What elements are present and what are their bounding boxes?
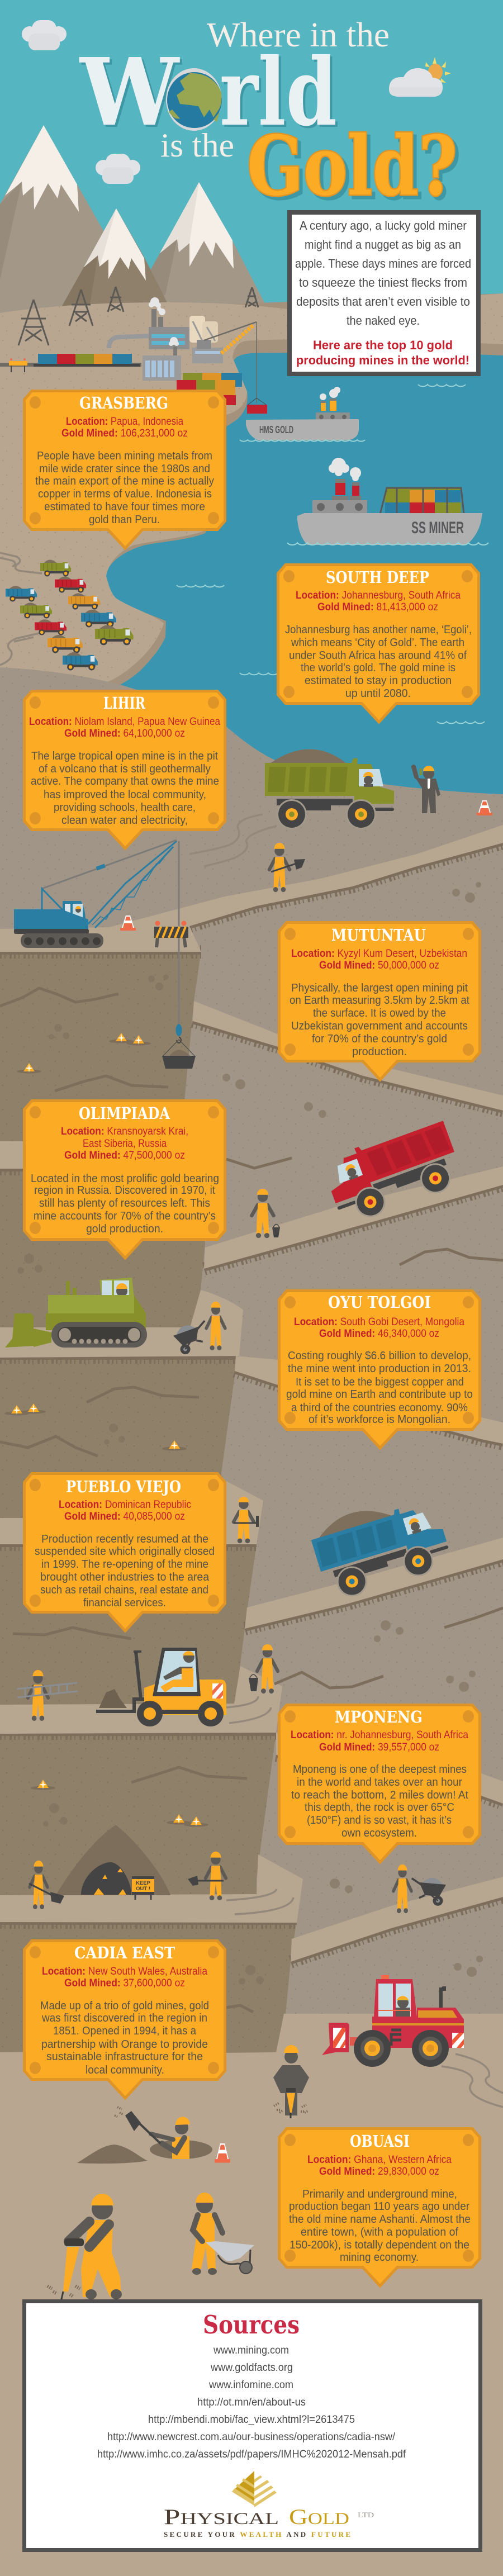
panel: Grasberg: the main export of the mine is actually <box>35 475 214 487</box>
panel: Mponeng: this depth, the rock is over 65°C <box>305 1801 454 1814</box>
panel: Grasberg: mile wide crater since the 1980s and <box>39 463 210 475</box>
panel: Mutuntau: Location: Kyzyl Kum Desert, Uzbekistan <box>291 948 467 960</box>
panel: Obuasi: entire town, (with a population of <box>301 2226 458 2238</box>
factory complex <box>109 297 223 381</box>
panel: Cadia East: Made up of a trio of gold mines, gold <box>40 2000 209 2012</box>
icon: sun behind cloud <box>389 57 451 97</box>
panel: Cadia East <box>25 1941 225 2098</box>
panel: Grasberg: copper in terms of value. Indonesia is <box>38 488 212 500</box>
title <box>79 16 457 214</box>
panel: Mponeng: MPONENG <box>335 1707 423 1726</box>
orange forklift <box>96 1648 226 1726</box>
intro text panel: Here are the top 10 gold <box>313 338 453 352</box>
panel: Obuasi: Gold Mined: 29,830,000 oz <box>319 2166 439 2177</box>
logo: Physical Gold: SECURE YOUR WEALTH AND FUTURE <box>164 2530 350 2539</box>
panel: Obuasi: OBUASI <box>350 2132 410 2151</box>
panel: South Deep: under South Africa has around 41% of <box>289 649 467 662</box>
man in suit on phone <box>414 766 440 813</box>
panel: South Deep: Gold Mined: 81,413,000 oz <box>317 601 438 613</box>
panel: South Deep: SOUTH DEEP <box>326 568 429 587</box>
panel: Obuasi: Primarily and underground mine, <box>302 2188 457 2200</box>
panel: Mutuntau: Physically, the largest open mining pit <box>291 982 468 994</box>
red dump truck tipping <box>320 1117 466 1227</box>
title: W <box>79 38 180 147</box>
panel: Lihir: Location: Niolam Island, Papua New Guinea <box>29 716 220 728</box>
keep out sign <box>132 1876 154 1900</box>
road barrier <box>9 358 27 372</box>
panel: Cadia East: sustainable infrastructure for the <box>46 2051 203 2063</box>
panel: Cadia East: partnership with Orange to provide <box>41 2038 208 2051</box>
panel: Lihir: has improved the local community, <box>44 789 206 801</box>
traffic cone <box>477 800 492 815</box>
ship: SS Miner: SS MINER <box>411 519 464 537</box>
worker with bucket <box>252 1189 280 1238</box>
intro text panel: the naked eye. <box>347 314 420 328</box>
panel: Obuasi <box>279 2128 480 2286</box>
logo: Physical Gold <box>164 2471 374 2539</box>
panel: Mponeng: Gold Mined: 39,557,000 oz <box>319 1742 439 1753</box>
panel: Grasberg: Gold Mined: 106,231,000 oz <box>61 428 188 439</box>
panel: Mutuntau: MUTUNTAU <box>331 926 426 945</box>
source links: www.infomine.com <box>208 2379 293 2391</box>
upper land: dark shoreline <box>0 293 503 727</box>
panel: Mponeng <box>279 1705 480 1862</box>
olive bulldozer <box>5 1278 147 1348</box>
source links: http://mbendi.mobi/fac_view.xhtml?l=2613475 <box>148 2414 355 2426</box>
panel: Pueblo Viejo: financial services. <box>83 1597 166 1609</box>
worker with bucket <box>249 1644 278 1693</box>
source links: www.goldfacts.org <box>210 2362 293 2374</box>
logo: Physical Gold: GOLD <box>289 2505 349 2529</box>
ship: SS Miner <box>287 458 488 545</box>
waves <box>177 385 485 723</box>
sea <box>0 335 503 805</box>
panel: Mutuntau: the surface. It is owed by the <box>313 1007 446 1019</box>
logo: Physical Gold: P HYSICAL <box>164 2505 279 2529</box>
title: Gold? <box>247 118 457 214</box>
panel: Mponeng: Location: nr. Johannesburg, South Africa <box>291 1729 468 1741</box>
mine pits <box>0 950 297 2057</box>
panel: Obuasi: production began 110 years ago under <box>289 2200 469 2213</box>
panel: Pueblo Viejo: brought other industries to the area <box>40 1571 210 1583</box>
large worker with wheelbarrow <box>192 2193 254 2275</box>
worker digging in a hole <box>77 2107 212 2164</box>
panel: Olimpiada: Gold Mined: 47,500,000 oz <box>64 1150 185 1161</box>
panel: Cadia East: Gold Mined: 37,600,000 oz <box>64 1977 185 1989</box>
panel: Mponeng: (150°F) and is so vast, it has it’s <box>307 1814 452 1827</box>
panel: sources <box>25 2302 481 2550</box>
ship: HMS Gold <box>240 387 365 442</box>
panel: Pueblo Viejo: Gold Mined: 40,085,000 oz <box>64 1511 185 1522</box>
panel: Mponeng: own ecosystem. <box>341 1827 417 1839</box>
large worker with jackhammer <box>48 2194 122 2304</box>
panel: Olimpiada: region in Russia. Discovered in 1970, it <box>34 1184 215 1197</box>
worker with hammer <box>234 1497 259 1543</box>
sky background <box>0 0 503 391</box>
panel: Cadia East: was first discovered in the region in <box>41 2012 207 2024</box>
panel: South Deep <box>278 564 478 722</box>
panel: South Deep: Johannesburg has another name, ‘Egoli’, <box>285 624 472 636</box>
panel: Grasberg: GRASBERG <box>79 393 168 412</box>
intro text panel: producing mines in the world! <box>296 353 469 367</box>
worker with jackhammer, seen from behind <box>273 2045 309 2118</box>
mine cave entrance with gold <box>81 1862 131 1895</box>
source links: http://www.newcrest.com.au/our-business/operations/cadia-nsw/ <box>107 2431 396 2443</box>
panel: Pueblo Viejo: in 1999. The re-opening of the mine <box>41 1558 208 1571</box>
blue dump truck <box>307 1489 454 1604</box>
panel: Pueblo Viejo: PUEBLO VIEJO <box>66 1477 181 1496</box>
panel: Grasberg: Location: Papua, Indonesia <box>66 416 183 428</box>
right mountain <box>134 182 268 335</box>
panel: Mponeng: in the world and takes over an hour <box>297 1776 462 1789</box>
panel: South Deep: the world’s gold. The gold mine is <box>301 662 455 674</box>
title: o <box>173 72 211 138</box>
intro text panel: might find a nugget as big as an <box>305 238 461 252</box>
panel: Lihir: providing schools, health care, <box>54 801 196 814</box>
worker with shovel <box>269 843 305 892</box>
panel: Olimpiada: OLIMPIADA <box>79 1104 170 1123</box>
panel: Lihir <box>25 691 225 848</box>
panel: Olimpiada: Location: Kransnoyarsk Krai, <box>61 1126 188 1137</box>
intro text panel: apple. These days mines are forced <box>295 257 471 271</box>
panel: Pueblo Viejo: suspended site which originally closed <box>35 1545 215 1558</box>
panel: Oyu Tolgoi: the mine went into production in 2013. <box>288 1363 471 1375</box>
traffic cone <box>215 2143 230 2163</box>
panel: Oyu Tolgoi: a third of the countries economy. 90% <box>291 1402 468 1414</box>
panel: Olimpiada: Located in the most prolific gold bearing <box>31 1173 219 1185</box>
upper land: sand <box>0 293 503 727</box>
title: Where in the <box>207 16 390 54</box>
worker carrying ladder <box>17 1670 78 1721</box>
panel: Oyu Tolgoi: gold mine on Earth and contribute up to <box>286 1388 473 1401</box>
traffic cone <box>120 915 136 931</box>
dirt pile <box>99 1689 127 1708</box>
panel: Grasberg: gold than Peru. <box>89 514 160 526</box>
tyre tracks <box>0 553 503 2107</box>
title: is the <box>160 127 234 164</box>
panel: Mutuntau: Uzbekistan government and accounts <box>291 1020 468 1032</box>
panel: Grasberg <box>25 391 225 548</box>
panel: Lihir: Gold Mined: 64,100,000 oz <box>64 728 185 739</box>
keep out sign: OUT ! <box>136 1886 150 1892</box>
panel: Obuasi: the old mine name Ashanti. Almost the <box>289 2213 471 2226</box>
train on rails <box>0 354 141 367</box>
cloud top left <box>22 20 67 50</box>
road and ledge network <box>0 825 503 1962</box>
panel: Olimpiada: still has plenty of resources left. This <box>39 1197 210 1209</box>
panel: Olimpiada <box>25 1101 225 1258</box>
red tractor with blade <box>322 1975 464 2067</box>
gold nuggets <box>4 1033 208 1827</box>
panel: Cadia East: 1851. Opened in 1994, it has a <box>53 2025 197 2037</box>
panel: Olimpiada: mine accounts for 70% of the country’s <box>34 1210 216 1222</box>
panel: Lihir: LIHIR <box>103 694 146 713</box>
cave mound <box>56 1825 170 1895</box>
panel: South Deep: estimated to stay in production <box>305 675 452 687</box>
blue crawler crane <box>14 840 196 1069</box>
striped road barrier <box>154 921 188 947</box>
left mountain <box>0 125 168 335</box>
cloud middle <box>96 154 140 184</box>
source links: www.mining.com <box>213 2345 289 2356</box>
panel: Oyu Tolgoi: Gold Mined: 46,340,000 oz <box>319 1328 439 1340</box>
intro text panel <box>290 212 478 374</box>
icon: globe <box>166 68 222 131</box>
keep out sign: KEEP <box>136 1880 151 1886</box>
panel: Oyu Tolgoi: Location: South Gobi Desert, Mongolia <box>294 1316 464 1328</box>
panel: Mutuntau: production. <box>352 1046 407 1058</box>
pylons <box>18 287 258 345</box>
panel: Oyu Tolgoi: OYU TOLGOI <box>328 1293 431 1312</box>
centre mountain <box>56 208 168 324</box>
source links <box>97 2345 406 2460</box>
panel: Pueblo Viejo <box>25 1473 225 1631</box>
panel: Lihir: The large tropical open mine is in the pit <box>31 750 218 762</box>
lower rock ground <box>0 667 503 2018</box>
source links: http://www.imhc.co.za/assets/pdf/papers/IMHC%202012-Mensah.pdf <box>97 2449 406 2460</box>
panel: Cadia East: CADIA EAST <box>74 1943 175 1962</box>
fleet of small trucks <box>6 560 134 670</box>
panel: Oyu Tolgoi: Costing roughly $6.6 billion to develop, <box>288 1350 471 1362</box>
intro text panel: deposits that aren’t even visible to <box>296 295 470 309</box>
panel: Mponeng: Mponeng is one of the deepest mines <box>293 1763 467 1776</box>
dock containers <box>177 373 242 405</box>
panel: Obuasi: mining economy. <box>340 2251 419 2264</box>
worker with wheelbarrow <box>393 1865 447 1913</box>
panel: Cadia East: Location: New South Wales, Australia <box>42 1966 207 1977</box>
panel: Cadia East: local community. <box>86 2064 164 2076</box>
panel: Obuasi: 150-200k), is totally dependent on the <box>290 2239 469 2251</box>
panel: South Deep: up until 2080. <box>345 687 411 700</box>
panel: Mutuntau: on Earth measuring 3.5km by 2.5km at <box>290 994 469 1007</box>
worker with wheelbarrow <box>172 1302 225 1356</box>
rock veins <box>0 988 503 2012</box>
intro text panel: to squeeze the tiniest flecks from <box>299 276 467 290</box>
panel: Oyu Tolgoi <box>279 1291 480 1448</box>
panel: Lihir: clean water and electricity, <box>61 814 188 827</box>
panel: Lihir: active. The company that owns the mine <box>31 775 219 787</box>
panel: Pueblo Viejo: such as retail chains, real estate and <box>40 1584 208 1596</box>
rock pebbles <box>17 882 483 1985</box>
ship: HMS Gold: HMS GOLD <box>259 424 293 435</box>
panel: Oyu Tolgoi: It is set to be the biggest copper and <box>296 1376 464 1388</box>
intro text panel: A century ago, a lucky gold miner <box>300 219 467 233</box>
worker with shovel, right <box>188 1852 226 1900</box>
panel: Pueblo Viejo: Location: Dominican Republic <box>59 1499 191 1511</box>
panel: Obuasi: Location: Ghana, Western Africa <box>307 2154 452 2166</box>
title: rld <box>220 38 337 147</box>
logo: Physical Gold: LTD <box>358 2511 374 2519</box>
panel: Grasberg: estimated to have four times more <box>44 501 205 513</box>
panel: Mutuntau: for 70% of the country’s gold <box>312 1033 447 1045</box>
large olive dump truck <box>265 749 394 829</box>
source links: http://ot.mn/en/about-us <box>197 2397 306 2408</box>
panel: Olimpiada: gold production. <box>86 1223 163 1235</box>
panel: Mutuntau: Gold Mined: 50,000,000 oz <box>319 960 439 971</box>
panel: South Deep: Location: Johannesburg, South Africa <box>296 590 461 601</box>
bottom sand floor <box>0 2014 503 2576</box>
panel: South Deep: which means ‘City of Gold’. The earth <box>291 637 464 649</box>
panel: Lihir: of a volcano that is still geothermally <box>39 763 211 775</box>
panel: Grasberg: People have been mining metals from <box>37 450 212 462</box>
panel: Pueblo Viejo: Production recently resumed at the <box>41 1533 208 1545</box>
worker with shovel, left <box>29 1861 64 1909</box>
heading: sources: Sources <box>203 2310 300 2340</box>
dock crane <box>204 322 267 414</box>
panel: Olimpiada: East Siberia, Russia <box>83 1138 167 1150</box>
panel: Mutuntau <box>279 922 480 1080</box>
panel: Mponeng: to reach the bottom, 2 miles down! At <box>291 1789 468 1801</box>
panel: Oyu Tolgoi: of it’s workforce is Mongolian. <box>309 1413 450 1426</box>
